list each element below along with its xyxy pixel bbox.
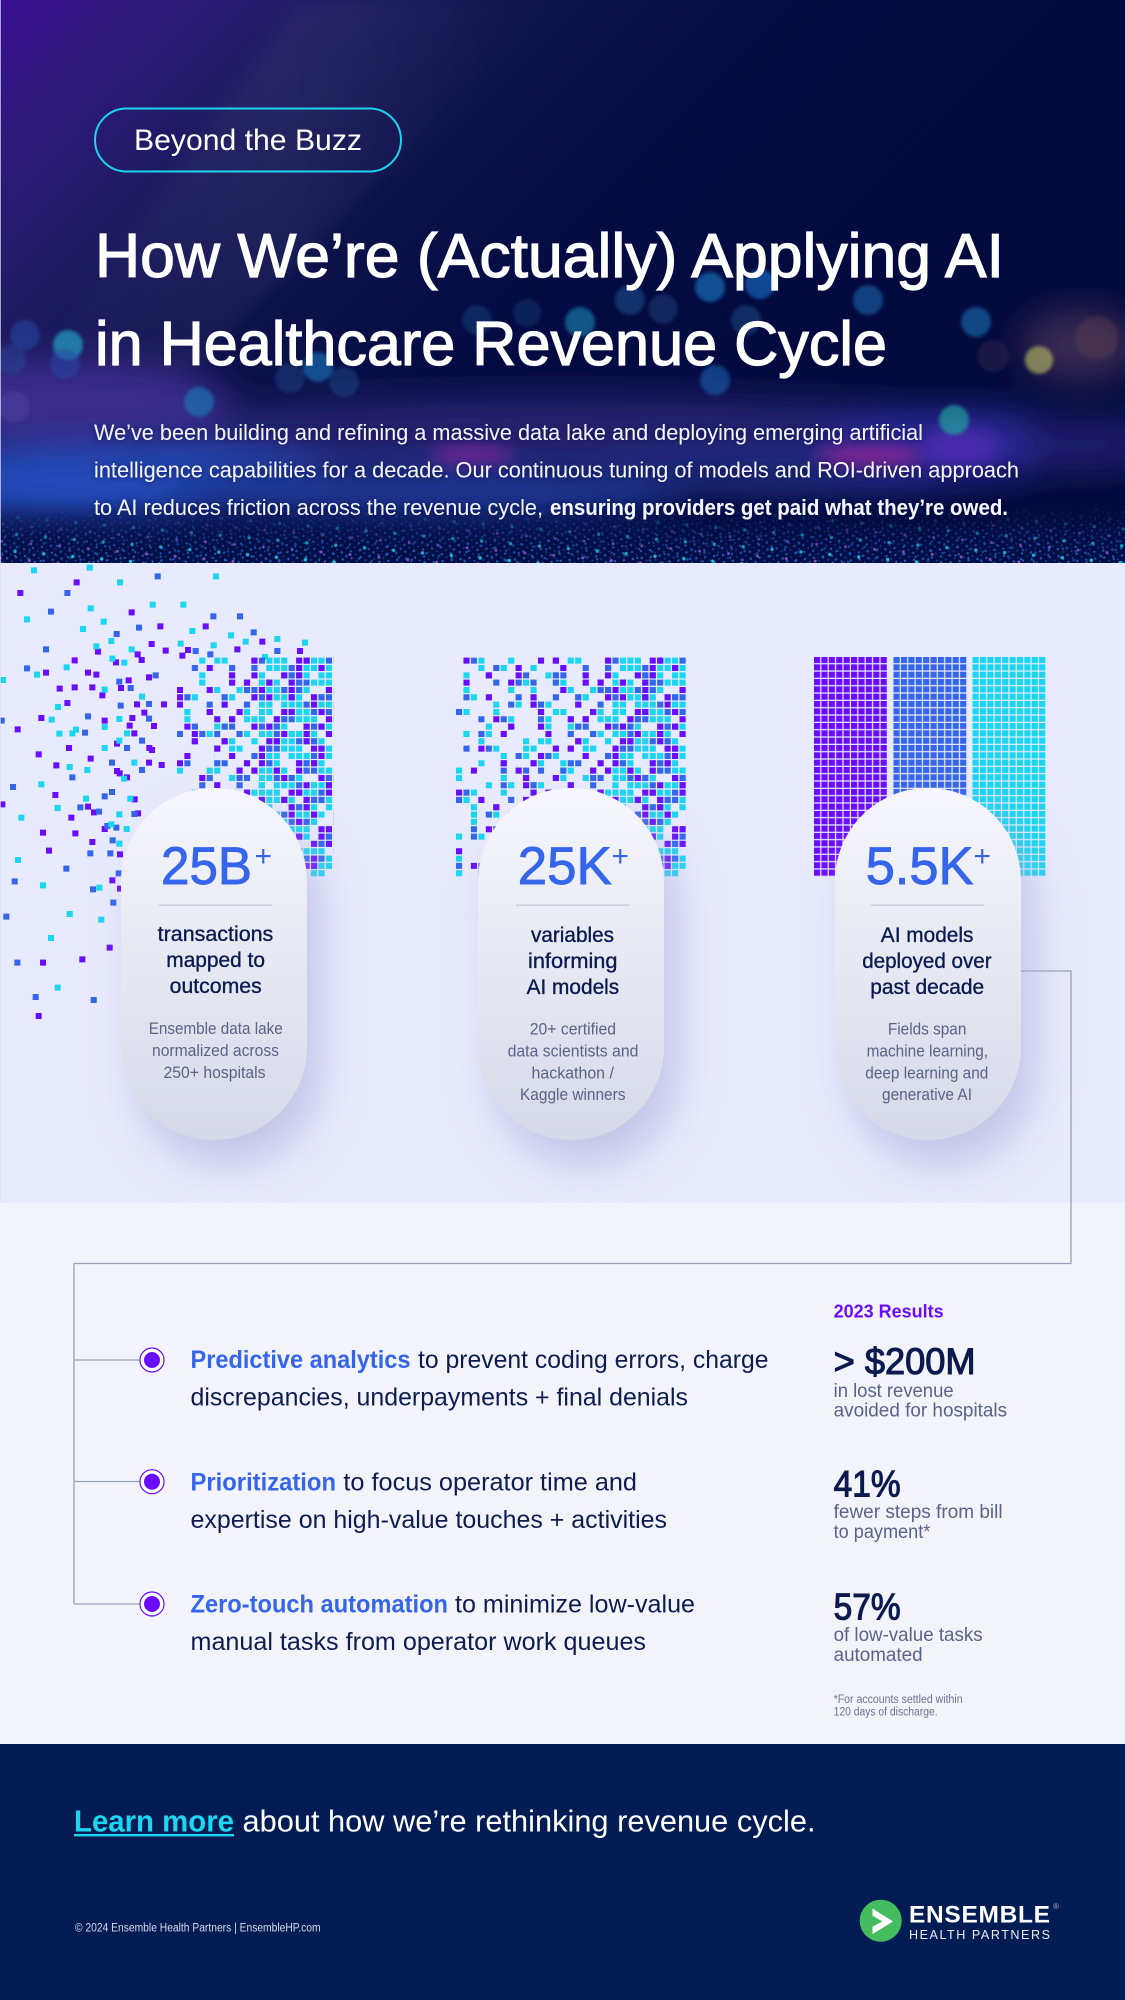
mosaic: grid three — [814, 657, 1046, 877]
title — [95, 222, 1004, 379]
result: lost revenue: avoided for hospitals — [834, 1401, 1007, 1422]
title: in Healthcare Revenue Cycle — [95, 310, 887, 379]
logo: HEALTH PARTNERS — [909, 1928, 1050, 1942]
panel: footer — [0, 1744, 1125, 2000]
capability: zero-touch automation: manual tasks from operator work queues — [190, 1628, 646, 1656]
capability: zero-touch automation — [140, 1591, 695, 1656]
mosaic: grid one — [176, 658, 334, 876]
card: 5.5K: past decade — [870, 976, 984, 999]
result: low-value tasks: automated — [834, 1645, 923, 1666]
result: lost revenue — [834, 1341, 1007, 1422]
intro paragraph: We’ve been building and refining a massive data lake and deploying emerging artificial — [94, 420, 923, 445]
card: 5.5K — [835, 788, 1021, 1140]
title: How We’re (Actually) Applying AI — [95, 222, 1004, 291]
capability: prioritization: to focus operator time and — [343, 1469, 637, 1497]
intro paragraph: ensuring providers get paid what they’re owed. — [550, 495, 1008, 520]
logo: ENSEMBLE — [909, 1901, 1050, 1928]
card: 25B: mapped to — [166, 949, 265, 972]
result: low-value tasks — [834, 1586, 983, 1666]
mosaic: grid two — [456, 658, 687, 876]
card: 5.5K: deployed over — [862, 950, 992, 973]
card: 5.5K: AI models — [881, 924, 973, 947]
mosaic: scattered data particles — [2, 568, 305, 1016]
card: 5.5K: + — [974, 840, 991, 873]
result: fewer steps — [834, 1464, 1003, 1543]
card: 25K — [478, 788, 664, 1140]
card: 25K: AI models — [527, 976, 619, 999]
card: 25B: normalized across — [152, 1042, 279, 1060]
result: lost revenue: > $200M — [834, 1341, 976, 1382]
capability: predictive analytics: to prevent coding errors, charge — [418, 1346, 768, 1374]
footnote: *For accounts settled within — [834, 1694, 963, 1706]
logo: ® — [1053, 1902, 1059, 1911]
tag pill — [95, 108, 401, 172]
card: 25K: 25K — [518, 837, 612, 896]
connector line — [74, 971, 1071, 1604]
call to action: Learn more — [74, 1804, 234, 1839]
card: 5.5K: 5.5K — [866, 837, 973, 896]
card: 25K: 20+ certified — [530, 1020, 616, 1038]
results heading: 2023 Results — [834, 1302, 944, 1322]
capability: prioritization: expertise on high-value touches + activities — [190, 1506, 667, 1534]
card: 25K: Kaggle winners — [520, 1086, 626, 1104]
card: 25B: outcomes — [170, 975, 262, 998]
capability: predictive analytics — [140, 1346, 768, 1412]
panel: capabilities background — [0, 1203, 1125, 1744]
copyright: © 2024 Ensemble Health Partners | EnsembleHP.com — [75, 1923, 321, 1935]
edge strip — [0, 0, 1, 1203]
card: 5.5K: Fields span — [888, 1020, 966, 1038]
capability: prioritization: Prioritization — [190, 1469, 336, 1497]
hero background — [0, 0, 1125, 563]
capability: prioritization — [140, 1469, 667, 1534]
result: fewer steps: fewer steps from bill — [834, 1502, 1003, 1523]
panel: stats background — [0, 563, 1125, 1203]
card: 25B — [121, 788, 307, 1140]
footnote — [834, 1694, 963, 1719]
capability: zero-touch automation: to minimize low-value — [455, 1591, 695, 1619]
card: 5.5K: generative AI — [882, 1086, 972, 1104]
card: 25B: transactions — [158, 923, 273, 946]
result: low-value tasks: 57% — [834, 1586, 901, 1627]
bokeh lights — [0, 269, 1119, 435]
card: 25B: + — [254, 840, 272, 873]
result: lost revenue: in lost revenue — [834, 1381, 954, 1402]
capability: zero-touch automation: Zero-touch automation — [190, 1591, 448, 1619]
card: 25K: variables — [531, 924, 614, 947]
intro paragraph: intelligence capabilities for a decade. Our continuous tuning of models and ROI-driven approach — [94, 458, 1019, 482]
card: 25B: Ensemble data lake — [149, 1020, 283, 1038]
call to action: about how we’re rethinking revenue cycle. — [242, 1804, 816, 1839]
card: 25K: + — [612, 840, 629, 873]
card: 25B: 250+ hospitals — [164, 1064, 266, 1082]
capability: predictive analytics: discrepancies, underpayments + final denials — [190, 1384, 688, 1412]
card: 25K: informing — [528, 950, 618, 973]
intro paragraph — [94, 420, 1019, 520]
intro paragraph: to AI reduces friction across the revenue cycle, — [94, 495, 543, 520]
footnote: 120 days of discharge. — [834, 1707, 938, 1719]
result: low-value tasks: of low-value tasks — [834, 1625, 983, 1646]
card: 5.5K: deep learning and — [865, 1064, 988, 1082]
card: 25B: 25B — [161, 837, 252, 896]
card: 25K: data scientists and — [508, 1042, 638, 1060]
result: fewer steps: to payment* — [834, 1522, 931, 1543]
card: 25K: hackathon / — [532, 1064, 614, 1082]
logo — [860, 1900, 1059, 1942]
result: fewer steps: 41% — [834, 1464, 901, 1505]
tag pill: Beyond the Buzz — [134, 124, 362, 157]
card: 5.5K: machine learning, — [867, 1042, 988, 1060]
capability: predictive analytics: Predictive analytics — [190, 1346, 410, 1374]
